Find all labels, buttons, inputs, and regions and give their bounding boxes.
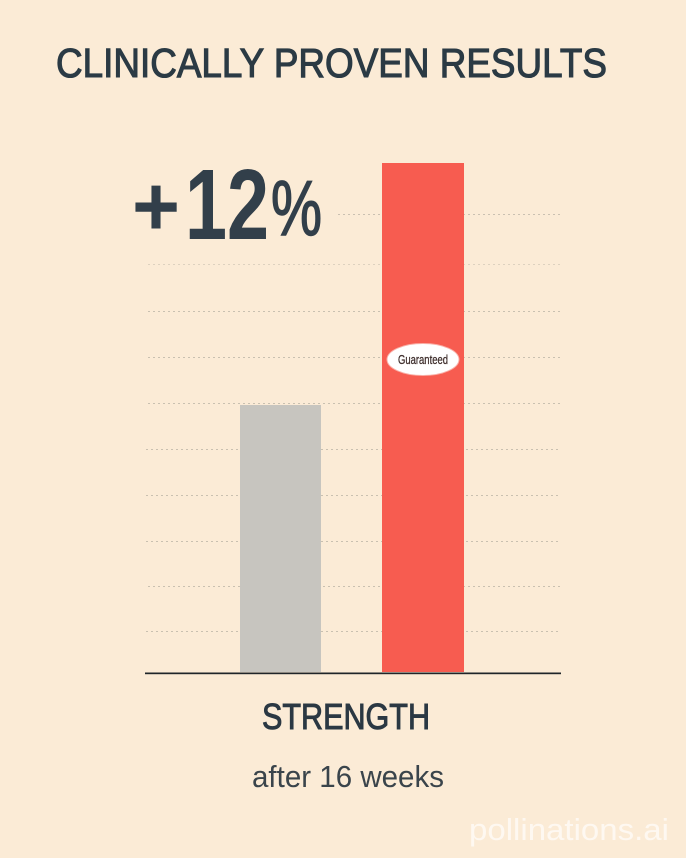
bar chart	[145, 163, 561, 674]
axis sublabel: after 16 weeks	[252, 759, 444, 794]
axis line	[145, 672, 561, 674]
bar badge	[387, 344, 459, 376]
callout: +12%	[132, 149, 322, 261]
bar: baseline	[240, 405, 321, 672]
bar: result	[382, 163, 464, 672]
title: CLINICALLY PROVEN RESULTS	[56, 40, 607, 86]
bar badge: Guaranteed	[398, 352, 448, 367]
callout: +12%: 12	[185, 149, 269, 261]
watermark: pollinations.ai	[469, 812, 669, 847]
axis label: strength: STRENGTH	[262, 696, 430, 737]
callout: +12%: +	[132, 159, 180, 253]
callout: +12%: %	[271, 164, 322, 252]
